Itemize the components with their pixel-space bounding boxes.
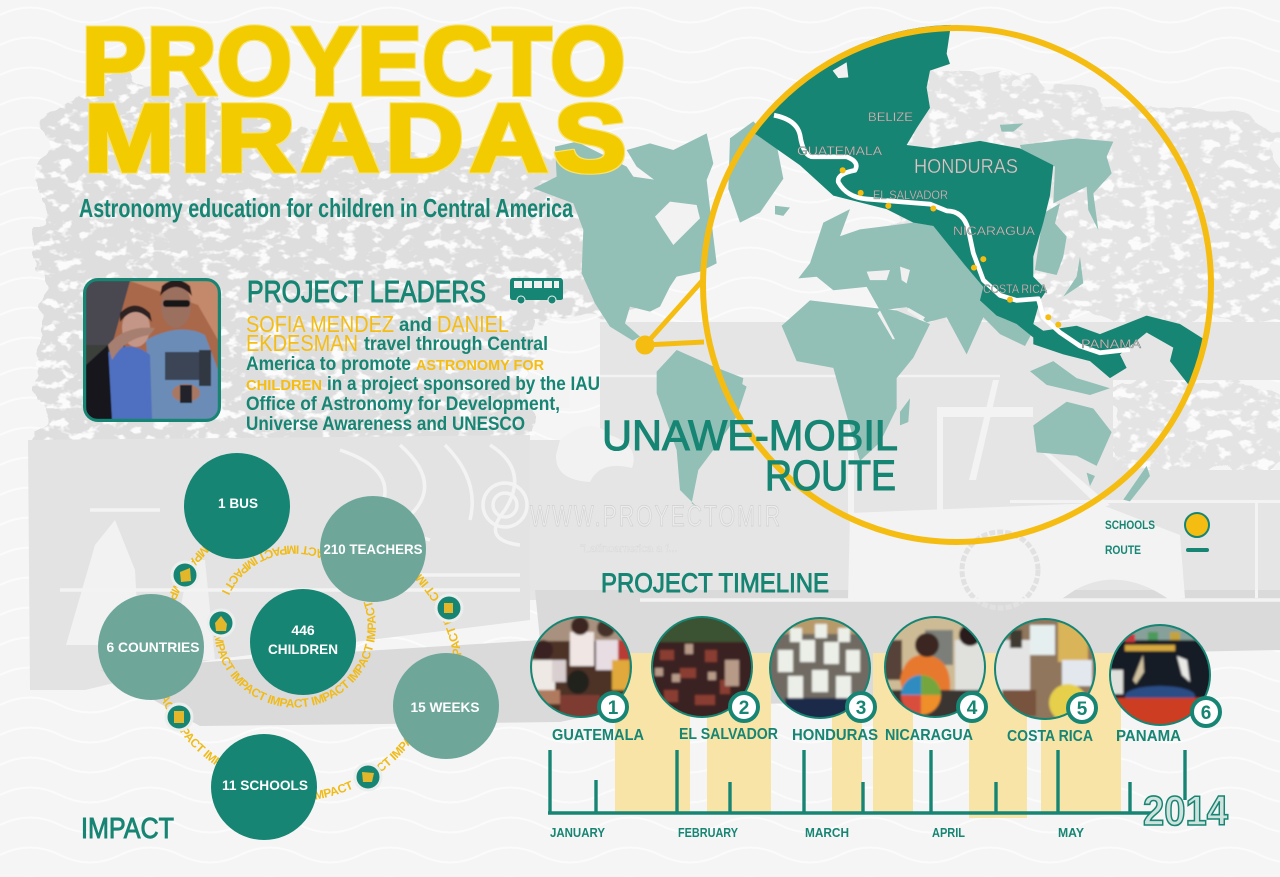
country labels on timeline: PANAMA	[1116, 728, 1181, 745]
connector dots	[166, 562, 462, 790]
circle: 446 children: 446	[291, 622, 315, 638]
timeline heading: PROJECT TIMELINE	[601, 568, 829, 598]
project leaders description: travel through Central	[364, 334, 548, 355]
number badges: 6	[1201, 703, 1211, 724]
month labels: MAY	[1058, 825, 1084, 840]
impact heading: IMPACT	[81, 813, 174, 845]
project leaders description: Office of Astronomy for Development,	[246, 394, 560, 415]
woman	[104, 346, 152, 419]
country labels on timeline	[552, 726, 1181, 745]
bus website lettering: WWW.PROYECTOMIR	[530, 501, 780, 533]
number badges: 2	[739, 698, 749, 719]
country labels on map: PANAMA	[1081, 337, 1141, 351]
impact diagram	[98, 453, 499, 840]
photo: honduras	[768, 616, 872, 720]
world map	[533, 121, 1150, 507]
project leaders description: in a project sponsored by the IAU	[327, 374, 600, 395]
country labels on timeline: COSTA RICA	[1007, 728, 1093, 745]
number badges: 1	[608, 698, 619, 719]
photo: el salvador	[650, 616, 754, 718]
photo: guatemala	[530, 616, 632, 718]
photo: panama	[1109, 624, 1211, 726]
circle: 6 countries	[98, 594, 204, 700]
map heading: UNAWE-MOBIL ROUTE	[602, 412, 898, 500]
number badges: 4	[967, 698, 978, 719]
circle: 446 children: CHILDREN	[268, 641, 338, 657]
ring text: inner: IMPACT IMPACT IMPACT IMPACT IMPACT IMPACT IMPACT IMPACT IMPACT IMPACT IMPACT IMPACT	[214, 545, 376, 708]
ring text: outer: IMPACT IMPACT IMPACT	[316, 738, 410, 800]
circle: 11 schools	[211, 734, 317, 840]
number badges: 5	[1077, 699, 1088, 720]
bus body	[848, 503, 1185, 600]
map heading: UNAWE-MOBIL ROUTE: UNAWE-MOBIL	[602, 412, 898, 460]
month labels	[550, 825, 1084, 840]
circle: 210 teachers: 210 TEACHERS	[324, 541, 422, 557]
project leaders description: ASTRONOMY FOR	[416, 357, 544, 374]
country labels on timeline: HONDURAS	[792, 727, 878, 744]
map legend	[1105, 513, 1209, 557]
school markers	[840, 167, 1061, 328]
country labels on map: NICARAGUA	[953, 224, 1035, 238]
title: PROYECTO	[82, 8, 625, 115]
project leaders description: EKDESMAN	[246, 330, 358, 356]
project leaders description: CHILDREN	[246, 377, 322, 394]
project leaders heading: PROJECT LEADERS	[247, 274, 486, 309]
map legend: SCHOOLS	[1105, 518, 1155, 532]
photo: costa rica	[994, 618, 1096, 722]
central america landmass	[733, 20, 1207, 387]
number badges: 3	[856, 698, 866, 719]
country labels on map: GUATEMALA	[797, 144, 882, 158]
map heading: UNAWE-MOBIL ROUTE: ROUTE	[765, 452, 896, 500]
man	[146, 330, 218, 419]
country labels on timeline: GUATEMALA	[552, 727, 644, 744]
title	[82, 8, 626, 192]
timeline axis	[548, 750, 1185, 813]
project leaders description: and	[399, 315, 432, 336]
country labels on timeline: NICARAGUA	[885, 727, 973, 744]
country labels on map: BELIZE	[868, 110, 913, 124]
colour wheel	[920, 692, 943, 716]
map legend: ROUTE	[1105, 543, 1141, 557]
country labels on map: EL SALVADOR	[873, 188, 948, 202]
ring text: outer: IMPACT IMPACT IMPACT	[416, 574, 462, 655]
country labels on map: HONDURAS	[914, 156, 1018, 178]
project leaders description	[246, 311, 600, 435]
old world inside the circle	[700, 121, 1150, 501]
south america	[657, 350, 747, 507]
siberia and japan	[1000, 123, 1113, 297]
circle outline	[703, 28, 1211, 542]
icon: bus	[510, 278, 563, 304]
country labels on timeline: EL SALVADOR	[679, 726, 778, 743]
month labels: JANUARY	[550, 825, 605, 840]
circle: 1 bus: 1 BUS	[218, 495, 258, 511]
country labels on map	[797, 110, 1141, 351]
month labels: FEBRUARY	[678, 825, 738, 840]
project leaders description: America to promote	[246, 354, 411, 375]
figures and mural	[66, 380, 634, 660]
circle: 210 teachers	[320, 496, 426, 602]
project leaders description: Universe Awareness and UNESCO	[246, 414, 525, 435]
circle: 446 children	[250, 589, 356, 695]
connector from central america to the zoom circle	[638, 281, 704, 352]
zoomed map of central america	[703, 20, 1211, 542]
month labels: MARCH	[805, 825, 849, 840]
background: grey photo of the bus and palm trees: "Latinoamerica a f...	[580, 543, 677, 555]
project leaders description: DANIEL	[437, 311, 509, 337]
circle: 15 weeks	[393, 653, 499, 759]
project leaders description: SOFIA MENDEZ	[246, 311, 394, 337]
number badges	[599, 693, 1220, 726]
photo: nicaragua	[884, 616, 986, 718]
circle: 6 countries: 6 COUNTRIES	[106, 639, 200, 655]
north america	[533, 133, 747, 507]
title: MIRADAS	[84, 84, 626, 192]
country labels on map: COSTA RICA	[983, 282, 1047, 296]
year: 2014	[1143, 787, 1229, 834]
circle: 1 bus	[184, 453, 290, 559]
circle: 11 schools: 11 SCHOOLS	[222, 777, 308, 793]
subtitle: Astronomy education for children in Central America	[79, 193, 573, 223]
month labels: APRIL	[932, 825, 965, 840]
timeline yellow bars	[615, 653, 1121, 818]
photo of project leaders	[83, 278, 221, 422]
route	[774, 115, 1130, 353]
circle: 15 weeks: 15 WEEKS	[410, 699, 480, 715]
ring text: outer	[162, 546, 462, 800]
